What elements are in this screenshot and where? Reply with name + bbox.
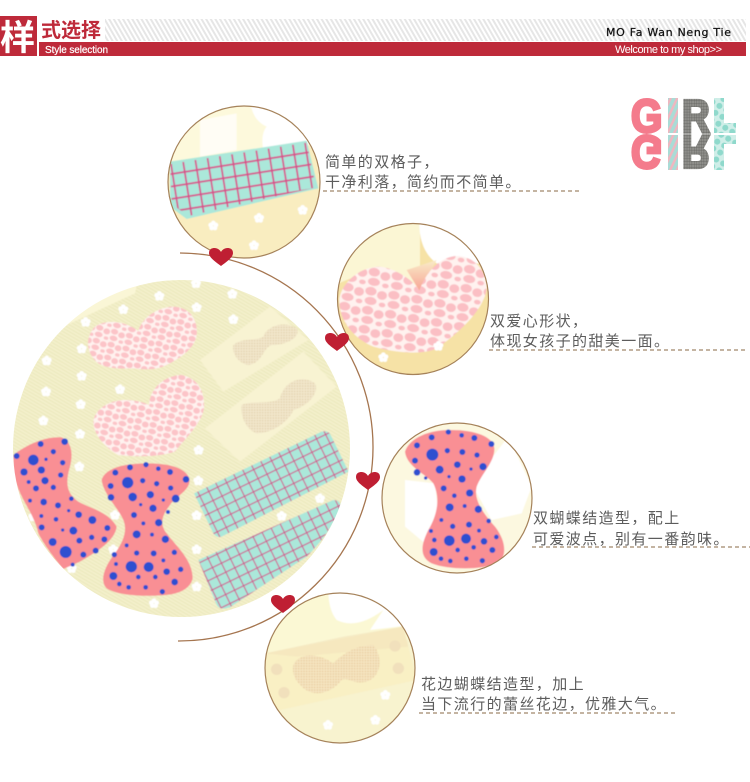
- polka dot bow clips: [13, 437, 193, 596]
- caption: polka dot bow clip: [532, 510, 750, 548]
- caption: lace bow clip: 当下流行的蕾丝花边，优雅大气。: [421, 696, 667, 713]
- connecting arc: [178, 253, 373, 641]
- brand name: MO Fa Wan Neng Tie: [606, 26, 731, 39]
- caption: polka dot bow clip: 可爱波点，别有一番韵味。: [533, 531, 730, 548]
- heart one: [209, 248, 233, 266]
- mint gingham clips: [194, 431, 349, 609]
- heart four: [271, 595, 295, 613]
- caption: heart clip: 双爱心形状，: [490, 313, 588, 330]
- caption: gingham clip: 简单的双格子，: [325, 154, 440, 171]
- hearts on arc: [209, 248, 380, 613]
- caption: heart clip: [489, 313, 747, 350]
- section subtitle: Style selection: [45, 45, 108, 56]
- background flowers: [28, 278, 325, 608]
- caption: lace bow clip: [419, 676, 678, 713]
- header hatch strip: [105, 19, 746, 41]
- title character: 样: [0, 19, 35, 58]
- heart two: [325, 333, 349, 351]
- logo top word: R: [682, 91, 710, 142]
- cream stick corner: [68, 286, 136, 324]
- logo top word: [631, 91, 736, 143]
- logo reflected word: R: [682, 126, 710, 177]
- detail circle: lace bow clip: [264, 592, 416, 744]
- header red bar: [39, 42, 746, 56]
- logo reflected word: [631, 125, 736, 177]
- red title square: [0, 16, 37, 56]
- heart three: [356, 472, 380, 490]
- caption: gingham clip: 干净利落，简约而不简单。: [325, 174, 522, 191]
- pink heart clips: [88, 307, 204, 456]
- detail circle: heart clip: [336, 222, 490, 376]
- logo reflected word: G: [631, 125, 662, 176]
- detail circle: gingham clip: [167, 105, 321, 259]
- header banner: [0, 16, 746, 58]
- GIRL logo with mirrored reflection: [631, 91, 736, 177]
- logo top word: G: [631, 92, 662, 143]
- caption: lace bow clip: 花边蝴蝶结造型，加上: [421, 676, 585, 693]
- caption: gingham clip: [323, 154, 581, 191]
- section title: 式选择: [41, 19, 101, 42]
- main product photo: [13, 280, 350, 617]
- welcome text: Welcome to my shop>>: [615, 44, 722, 56]
- caption: polka dot bow clip: 双蝴蝶结造型，配上: [533, 510, 681, 527]
- detail circle: polka dot bow clip: [380, 420, 536, 576]
- caption: heart clip: 体现女孩子的甜美一面。: [490, 332, 670, 350]
- lace clips: [200, 307, 337, 462]
